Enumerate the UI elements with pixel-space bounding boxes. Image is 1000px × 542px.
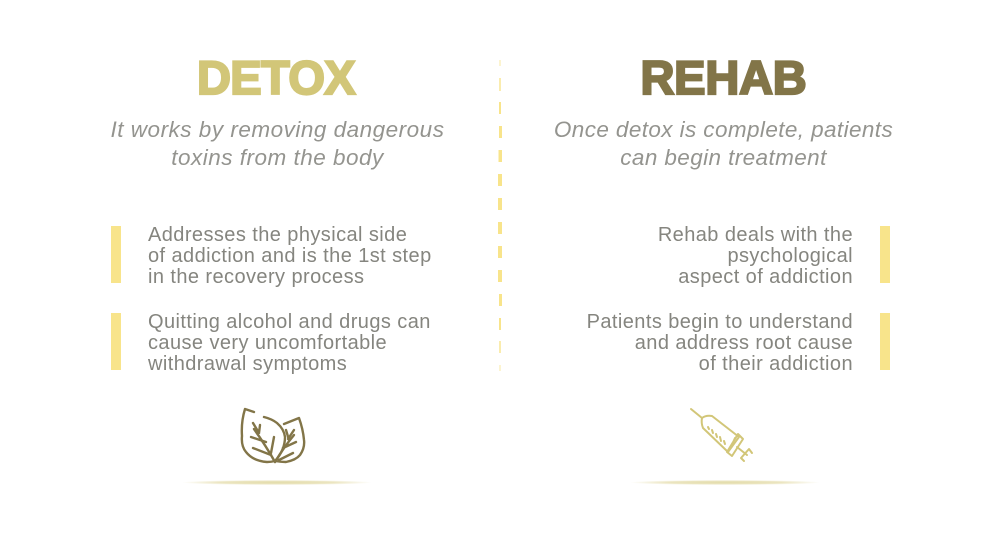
- rehab point 1: Rehab deals with the: [658, 224, 853, 246]
- title: REHAB: REHAB: [640, 51, 807, 104]
- icon: syringe: [690, 408, 753, 462]
- detox point 2: Quitting alcohol and drugs can: [148, 311, 431, 333]
- detox point 1: in the recovery process: [148, 266, 364, 288]
- detox point 2: withdrawal symptoms: [148, 353, 347, 375]
- ground shadow: [630, 480, 820, 485]
- ground shadow: [182, 480, 372, 485]
- panel: rehab: [554, 51, 893, 485]
- accent bar 1: [111, 226, 121, 283]
- rehab point 1: [658, 224, 853, 288]
- rehab point 1: psychological: [727, 245, 853, 267]
- detox point 1: Addresses the physical side: [148, 224, 407, 246]
- rehab subtitle: [554, 117, 893, 170]
- rehab point 2: Patients begin to understand: [587, 311, 853, 333]
- divider: dashed line: [498, 60, 502, 371]
- accent bar 2: [111, 313, 121, 370]
- detox subtitle: It works by removing dangerous: [111, 117, 444, 142]
- accent bar 2: [880, 313, 890, 370]
- title: DETOX: DETOX: [197, 51, 355, 104]
- detox point 2: [148, 311, 431, 375]
- rehab point 1: aspect of addiction: [678, 266, 853, 288]
- panel: detox: [111, 51, 444, 485]
- detox subtitle: toxins from the body: [171, 145, 384, 170]
- detox point 1: of addiction and is the 1st step: [148, 245, 432, 267]
- rehab point 2: and address root cause: [635, 332, 853, 354]
- detox point 2: cause very uncomfortable: [148, 332, 387, 354]
- rehab point 2: of their addiction: [699, 353, 853, 375]
- rehab subtitle: can begin treatment: [620, 145, 827, 170]
- rehab point 2: [587, 311, 853, 375]
- detox point 1: [148, 224, 432, 288]
- detox subtitle: [111, 117, 444, 170]
- icon: leaves: [240, 408, 306, 464]
- accent bar 1: [880, 226, 890, 283]
- rehab subtitle: Once detox is complete, patients: [554, 117, 893, 142]
